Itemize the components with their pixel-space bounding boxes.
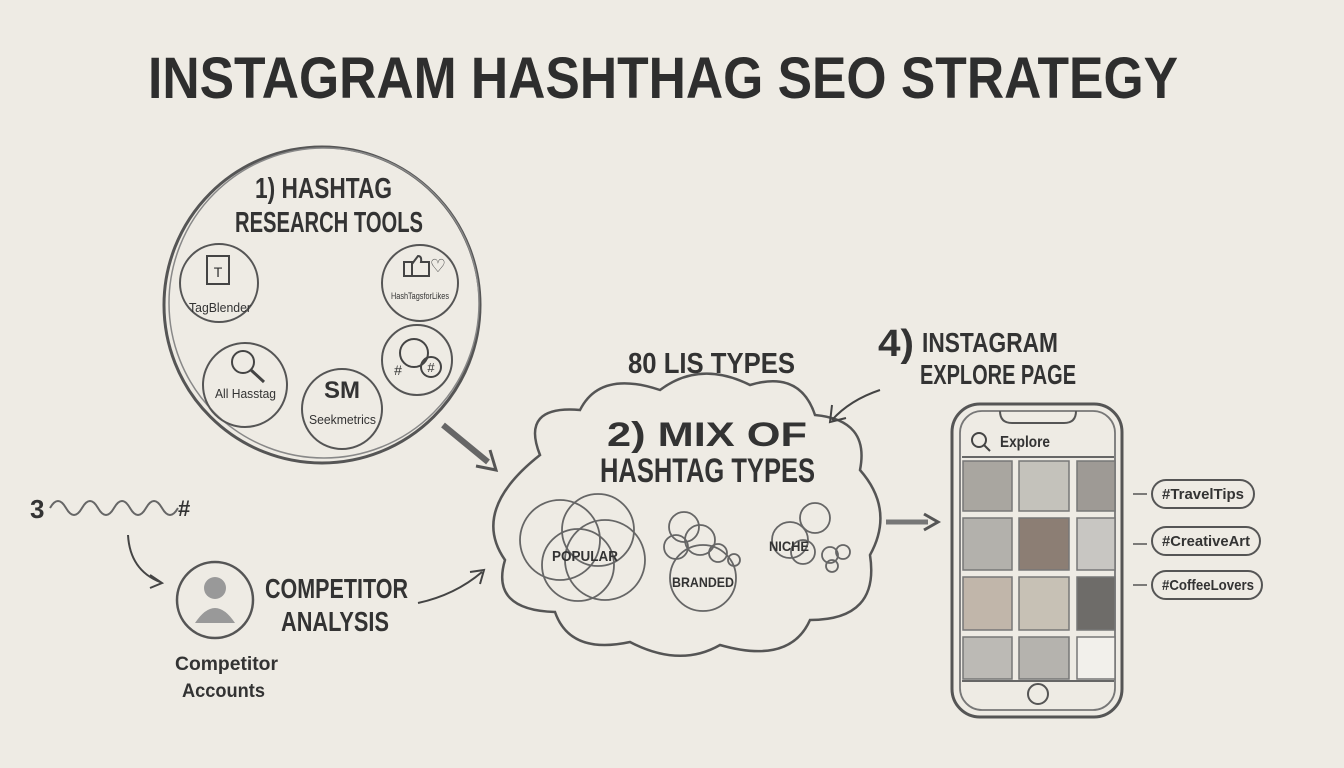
tag: CreativeArt: #CreativeArt: [1162, 533, 1250, 550]
arrow: competitor to cloud: [418, 570, 484, 603]
venn: niche: NICHE: [769, 538, 809, 554]
step 3 label: [30, 494, 190, 524]
venn: branded: [664, 512, 740, 611]
venn: branded: BRANDED: [672, 574, 734, 590]
panel: competitor analysis: Accounts: [182, 681, 265, 702]
tag: TravelTips: #TravelTips: [1162, 486, 1244, 503]
heading: explore page: EXPLORE PAGE: [920, 359, 1076, 390]
venn: popular: [520, 494, 645, 601]
tag: CoffeeLovers: #CoffeeLovers: [1162, 577, 1254, 594]
heading: explore page: [878, 323, 1076, 390]
step 3 label: 3: [30, 494, 44, 524]
tool: Seekmetrics: Seekmetrics: [309, 412, 376, 427]
panel: research tools: RESEARCH TOOLS: [235, 207, 423, 239]
panel: research tools: [164, 147, 480, 463]
tool: Seekmetrics: [302, 369, 382, 449]
tool: TagBlender: [180, 244, 258, 322]
arrow: tools to cloud: [443, 425, 496, 470]
heading: explore page: 4): [878, 323, 914, 365]
heading: competitor analysis: COMPETITOR: [265, 573, 408, 604]
tool: globe hashtag: [382, 325, 452, 395]
tool: hashtagsforlikes: [382, 245, 458, 321]
search bar: Explore: [1000, 434, 1050, 451]
heading: explore page: INSTAGRAM: [922, 327, 1058, 358]
tool: globe hashtag: #: [394, 362, 402, 378]
text: competitor accounts: Competitor: [175, 654, 279, 675]
panel: mix cloud: HASHTAG TYPES: [600, 452, 815, 490]
tool: hashtagsforlikes: HashTagsforLikes: [391, 291, 449, 301]
heading: research tools: 1) HASHTAG: [255, 173, 392, 205]
tool: hashtagsforlikes: ♡: [430, 256, 446, 276]
tool: TagBlender: TagBlender: [189, 300, 252, 315]
panel: competitor analysis: [175, 562, 408, 702]
tool: All Hashtag: [203, 343, 287, 427]
icon: competitor avatar: [177, 562, 253, 638]
tags: [1133, 480, 1262, 599]
venn: niche: [769, 503, 850, 572]
heading: mix of hashtag types: 2) MIX OF: [607, 416, 807, 454]
arrow: step3 to competitor: [128, 535, 162, 588]
tool: globe hashtag: #: [427, 360, 435, 375]
phone: [952, 404, 1122, 717]
tool: All Hashtag: All Hasstag: [215, 386, 276, 401]
panel: mix cloud: [493, 374, 880, 656]
text: 80 LIS TYPES: 80 LIS TYPES: [628, 348, 795, 380]
tool: Seekmetrics: SM: [324, 377, 360, 404]
step 3 label: #: [178, 496, 190, 521]
venn: popular: POPULAR: [552, 548, 618, 565]
tool: TagBlender: T: [214, 264, 223, 280]
arrow: cloud to phone: [886, 514, 938, 530]
panel: competitor analysis: ANALYSIS: [281, 606, 389, 637]
photo grid: [963, 461, 1115, 679]
arrow: explore to cloud: [830, 390, 880, 422]
search bar: [972, 433, 1050, 451]
title: INSTAGRAM HASHTHAG SEO STRATEGY: [148, 46, 1178, 111]
